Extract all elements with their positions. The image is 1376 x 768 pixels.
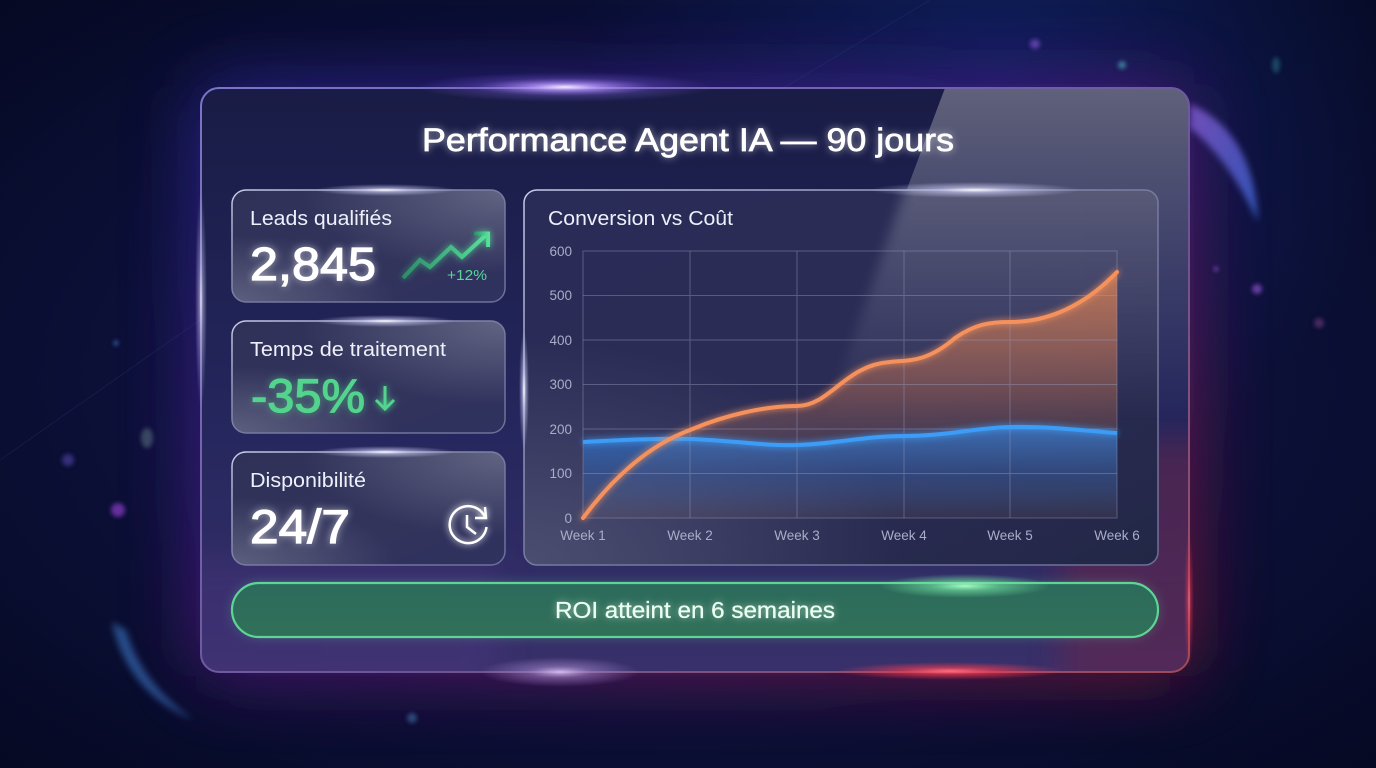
glossy reflection: [907, 89, 1188, 376]
label: Temps de traitement: [250, 339, 446, 361]
y axis labels: 300: [549, 377, 572, 392]
decorative arcs: [112, 104, 1258, 720]
title: Performance Agent IA — 90 jours: [422, 122, 954, 158]
chart glass reflection: [850, 190, 1158, 376]
chart title: Conversion vs Coût: [548, 208, 733, 230]
value: 24/7: [250, 500, 350, 553]
label: Leads qualifiés: [250, 208, 392, 230]
x axis labels: Week 2: [667, 528, 713, 543]
icon: clock: [450, 506, 486, 543]
card: leads qualifiés: [232, 184, 505, 302]
y axis labels: 600: [549, 244, 572, 259]
delta: +12%: [447, 267, 487, 284]
icon: down arrow: [376, 386, 394, 409]
line: blue: [583, 427, 1117, 445]
y axis labels: 200: [549, 422, 572, 437]
line: orange: [583, 272, 1117, 518]
area: orange: [583, 272, 1117, 518]
main glass panel: [170, 88, 1220, 700]
panel: chart: [520, 182, 1159, 566]
y axis labels: 100: [549, 466, 572, 481]
x axis labels: Week 3: [774, 528, 820, 543]
callout text: ROI atteint en 6 semaines: [555, 597, 835, 623]
y axis labels: 500: [549, 288, 572, 303]
panel edge flares: [195, 72, 1194, 687]
x axis labels: Week 1: [560, 528, 606, 543]
x axis labels: Week 4: [881, 528, 927, 543]
area: blue: [583, 427, 1117, 518]
callout: ROI pill: [232, 574, 1158, 637]
icon: trend arrow: [403, 234, 488, 278]
x axis labels: [560, 528, 1140, 543]
label: Disponibilité: [250, 470, 366, 492]
card: disponibilité: [232, 446, 505, 565]
y axis labels: 400: [549, 333, 572, 348]
grid: [583, 251, 1117, 518]
value: 2,845: [250, 238, 376, 290]
value: -35%: [251, 369, 365, 422]
y axis labels: [549, 244, 572, 526]
x axis labels: Week 6: [1094, 528, 1140, 543]
card: temps de traitement: [232, 315, 505, 433]
x axis labels: Week 5: [987, 528, 1033, 543]
y axis labels: 0: [564, 511, 572, 526]
